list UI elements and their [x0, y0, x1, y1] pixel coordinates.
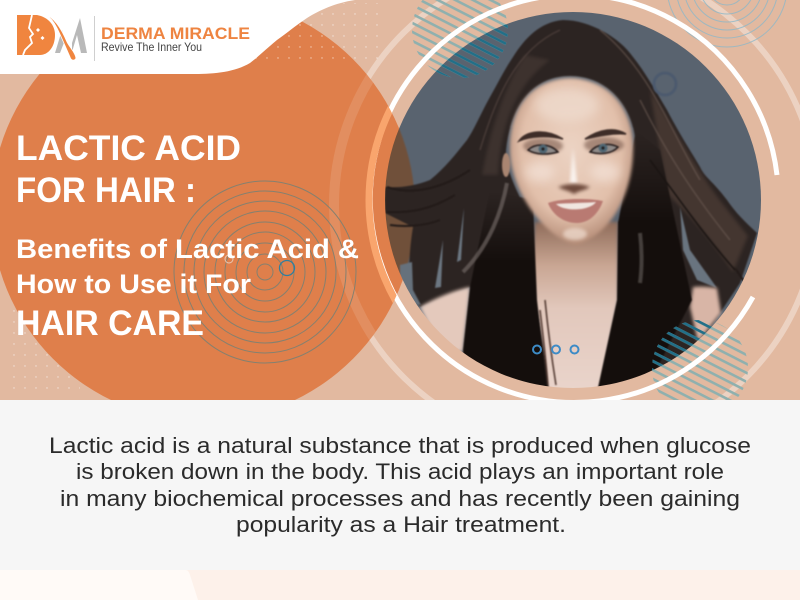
logo divider — [94, 16, 95, 61]
intro paragraph: is broken down in the body. This acid plays an important role — [76, 459, 724, 484]
bottom strip — [0, 570, 800, 600]
logo mark: face profile line — [23, 15, 33, 55]
title line 1: LACTIC ACID — [16, 129, 241, 168]
hair mass — [385, 20, 757, 395]
title line 3: HAIR CARE — [16, 304, 204, 343]
right backdrop gap — [680, 207, 717, 288]
intro paragraph: in many biochemical processes and has recently been gaining — [60, 486, 740, 511]
nose shadow — [558, 184, 590, 194]
crown hair sheen — [482, 55, 550, 175]
orange overlap on backdrop — [385, 128, 414, 274]
tagline: Revive The Inner You — [101, 40, 202, 54]
left backdrop thin streak — [457, 208, 464, 262]
left shoulder — [420, 287, 470, 352]
face — [510, 78, 633, 245]
left backdrop gap — [400, 262, 421, 305]
orange circle — [0, 0, 415, 421]
hero background — [0, 0, 800, 400]
intro paragraph: popularity as a Hair treatment. — [236, 512, 566, 537]
blue accent ring — [280, 260, 294, 276]
neck and chest — [530, 222, 618, 395]
portrait photo — [385, 12, 761, 388]
left black lock — [463, 190, 548, 395]
subtitle line 2: How to Use it For — [16, 269, 252, 299]
pale accent ring — [225, 255, 233, 263]
chin highlight — [563, 228, 587, 240]
white ring arc — [370, 0, 777, 402]
faint ring over orange circle — [329, 74, 376, 340]
striped circle: bottom — [652, 320, 748, 400]
left eyebrow — [519, 132, 563, 141]
forehead highlight — [535, 88, 599, 122]
logo header shape — [0, 0, 355, 74]
striped circle: top — [412, 0, 508, 78]
intro panel — [0, 400, 800, 570]
nose highlight — [570, 148, 577, 183]
hair strand highlights — [463, 30, 735, 385]
left hair wisps — [387, 170, 747, 285]
lips — [548, 199, 603, 223]
three small blue rings — [533, 346, 578, 354]
dot pattern: top — [250, 3, 380, 65]
left eye — [528, 144, 558, 154]
right shoulder — [690, 287, 721, 342]
ear — [502, 153, 510, 177]
concentric rings: centre — [174, 181, 356, 363]
photo backdrop — [398, 12, 761, 354]
title block — [16, 129, 359, 343]
brand name: DERMA MIRACLE — [101, 24, 250, 43]
logo mark: D with face — [17, 15, 55, 55]
peach ring over orange circle — [366, 106, 396, 303]
logo mark: stars — [36, 28, 44, 40]
concentric rings: top right — [667, 0, 787, 47]
right eye shadow — [584, 137, 624, 153]
stripes over photo — [436, 24, 716, 370]
logo mark: M — [55, 18, 87, 53]
teeth — [556, 202, 596, 209]
subtitle line 1: Benefits of Lactic Acid & — [16, 234, 359, 264]
right cheek highlight — [590, 162, 620, 182]
logo mark: hair follicle — [45, 14, 76, 60]
right hair sheen — [650, 90, 748, 272]
left eye shadow — [523, 138, 563, 154]
right black lock — [597, 130, 692, 392]
title line 2: FOR HAIR : — [16, 171, 196, 210]
right eyebrow — [585, 130, 626, 139]
intro paragraph — [49, 433, 751, 537]
faint ring on backdrop — [654, 73, 676, 95]
left cheek highlight — [525, 162, 555, 182]
dot pattern: left — [5, 265, 80, 395]
left backdrop streak — [435, 240, 443, 288]
right eye — [590, 144, 618, 154]
intro paragraph: Lactic acid is a natural substance that is produced when glucose — [49, 433, 751, 458]
logo — [17, 14, 250, 61]
outer faint ring — [332, 0, 800, 448]
bottom strip tab — [0, 570, 198, 600]
